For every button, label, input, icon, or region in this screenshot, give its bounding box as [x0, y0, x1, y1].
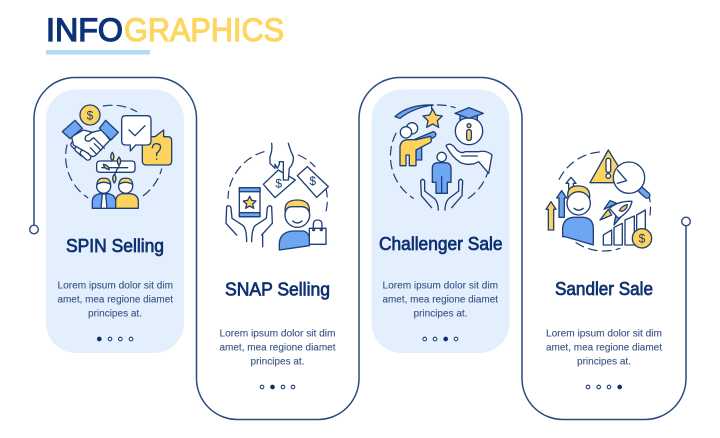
- body text: Lorem ipsum dolor sit dim: [58, 280, 173, 292]
- heading: SPIN Selling: [66, 236, 164, 256]
- body text: principes at.: [414, 308, 468, 320]
- icon: handshake and conversation: [62, 105, 172, 208]
- heading: Sandler Sale: [555, 279, 653, 299]
- icon: risk, growth and rocket: $: [639, 232, 646, 246]
- body text: Lorem ipsum dolor sit dim: [382, 280, 498, 292]
- heading: Challenger Sale: [379, 234, 502, 254]
- title: GRAPHICS: [124, 12, 284, 48]
- icon: shopper with price tags: [226, 143, 328, 250]
- title: [46, 12, 284, 55]
- panel: Challenger Sale background: [372, 90, 510, 353]
- icon: handshake and conversation: $: [87, 108, 94, 122]
- body text: amet, mea regione diamet: [220, 342, 336, 354]
- body text: principes at.: [250, 356, 304, 368]
- heading: SNAP Selling: [225, 280, 330, 300]
- body text: amet, mea regione diamet: [546, 342, 662, 354]
- title: INFO: [46, 12, 123, 48]
- body text: principes at.: [577, 356, 631, 368]
- panel: Challenger Sale: [379, 105, 502, 341]
- icon: people and education: [390, 105, 492, 210]
- pagination dots: [586, 385, 622, 389]
- pagination dots: [98, 337, 133, 341]
- pagination dots: [423, 337, 458, 341]
- body text: Lorem ipsum dolor sit dim: [546, 328, 662, 340]
- panel: SPIN Selling: [58, 105, 173, 341]
- body text: amet, mea regione diamet: [382, 294, 498, 306]
- body text: amet, mea regione diamet: [58, 294, 173, 306]
- body text: Lorem ipsum dolor sit dim: [220, 328, 336, 340]
- panel: Sandler Sale: [546, 150, 662, 389]
- icon: shopper with price tags: $: [309, 174, 316, 188]
- pagination dots: [260, 385, 295, 389]
- icon: risk, growth and rocket: [546, 150, 652, 251]
- connecting outline frame: [34, 78, 686, 420]
- end node: [682, 217, 690, 226]
- panel: SPIN Selling background: [46, 90, 184, 353]
- panel: SNAP Selling: [220, 143, 336, 389]
- icon: shopper with price tags: $: [275, 177, 282, 191]
- body text: principes at.: [88, 308, 142, 320]
- start node: [30, 225, 38, 234]
